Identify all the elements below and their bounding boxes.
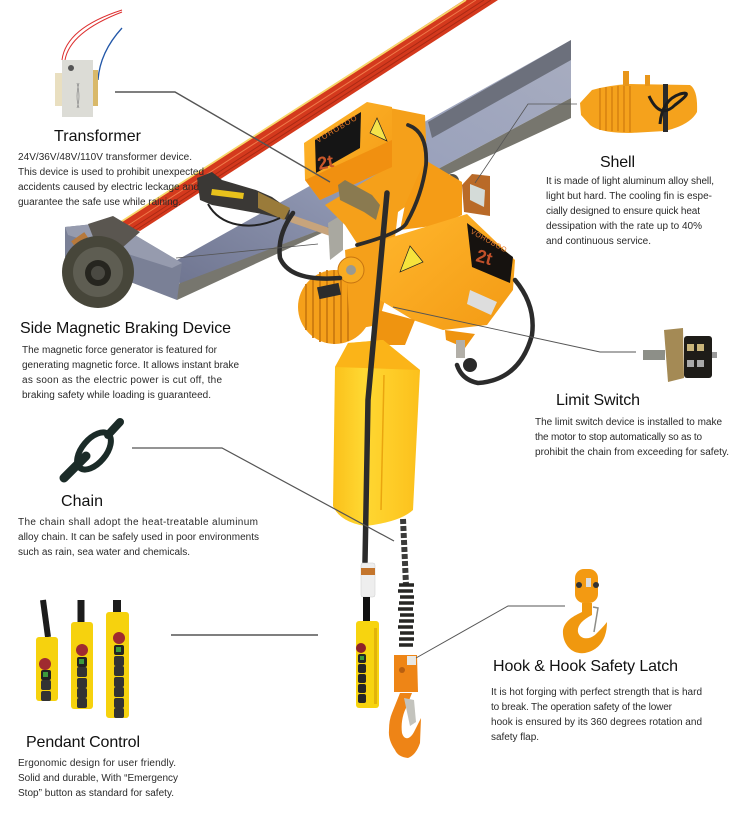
panel: shell: [546, 71, 714, 247]
motor: [298, 270, 372, 344]
text: shell description: dessipation with the rate up to 40%: [546, 221, 702, 232]
neck below gear: [375, 310, 415, 345]
hoist unit: VOHOBOO: [469, 229, 508, 254]
cables: [280, 125, 533, 562]
text: shell description: It is made of light aluminum alloy shell,: [546, 176, 714, 187]
icon: pendant with six buttons: [71, 600, 93, 709]
icon: pendant with four buttons: [36, 600, 58, 701]
text: limit switch description: prohibit the chain from exceeding for safety.: [535, 447, 729, 458]
hoist unit: [298, 102, 515, 372]
text: pendant description: Solid and durable, With “Emergency: [18, 773, 178, 784]
panel: hook and safety latch: [491, 569, 702, 743]
text: braking description: [22, 345, 239, 401]
steel beam: [65, 40, 571, 300]
icon: limit switch: [643, 328, 717, 382]
text: transformer description: guarantee the safe use while raining.: [18, 197, 181, 208]
text: pendant description: Stop” button as standard for safety.: [18, 788, 174, 799]
rear junction box: [462, 174, 490, 216]
text: shell description: [546, 176, 714, 247]
panel: pendant control: [18, 600, 178, 799]
text: shell description: cially designed to ensure quick heat: [546, 206, 700, 217]
icon: pendant with eight buttons: [106, 600, 129, 718]
text: limit switch description: The limit switch device is installed to make: [535, 417, 722, 428]
text: hook description: hook is ensured by its 360 degrees rotation and: [491, 717, 702, 728]
text: chain description: The chain shall adopt the heat-treatable aluminum: [18, 517, 258, 528]
text: braking description: as soon as the electric power is cut off, the: [22, 375, 222, 386]
brake cylinder: [338, 180, 380, 220]
heading: side magnetic braking device: Side Magnetic Braking Device: [20, 320, 231, 337]
text: limit switch description: [535, 417, 729, 458]
text: shell description: and continuous service.: [546, 236, 651, 247]
text: chain description: [18, 517, 259, 558]
text: transformer description: accidents caused by electric leckage and: [18, 182, 199, 193]
hand pendant on hoist: [356, 563, 379, 708]
panel: transformer: [18, 10, 204, 208]
text: transformer description: This device is used to prohibit unexpected: [18, 167, 204, 178]
text: chain description: alloy chain. It can be safely used in poor environments: [18, 532, 259, 543]
text: hook description: to break. The operation safety of the lower: [491, 702, 673, 713]
chain bag: [333, 340, 420, 526]
panel: chain: [18, 422, 259, 558]
hoist unit: 2t: [474, 246, 495, 269]
heading: limit switch: Limit Switch: [556, 392, 640, 409]
text: pendant description: [18, 758, 178, 799]
heading: hook and hook safety latch: Hook & Hook Safety Latch: [493, 658, 678, 675]
hoist unit: 2t: [316, 151, 335, 174]
text: limit switch description: the motor to stop automatically so as to: [535, 432, 702, 443]
control box upper: [304, 102, 392, 200]
heading: transformer: Transformer: [54, 128, 142, 145]
text: braking description: The magnetic force generator is featured for: [22, 345, 218, 356]
text: chain description: such as rain, sea water and chemicals.: [18, 547, 190, 558]
load chain and spring: [398, 519, 414, 645]
heading: chain: Chain: [61, 493, 103, 510]
text: pendant description: Ergonomic design for user friendly.: [18, 758, 176, 769]
current collector trolley: [197, 172, 343, 260]
icon: transformer: [55, 10, 122, 117]
text: hook description: safety flap.: [491, 732, 539, 743]
text: transformer description: 24V/36V/48V/110V transformer device.: [18, 152, 192, 163]
text: braking description: braking safety while loading is guaranteed.: [22, 390, 211, 401]
text: braking description: generating magnetic force. It allows instant brake: [22, 360, 239, 371]
gear case: [380, 214, 515, 330]
upper frame: [325, 108, 428, 248]
leader lines: [115, 92, 636, 658]
text: hook description: It is hot forging with perfect strength that is hard: [491, 687, 702, 698]
heading: shell: Shell: [600, 154, 635, 171]
text: transformer description: [18, 152, 204, 208]
panel: limit switch: [535, 328, 729, 458]
text: shell description: light but hard. The cooling fin is espe-: [546, 191, 712, 202]
hook block and lower hook: [389, 655, 421, 758]
hoist unit: VOHOBOO: [314, 113, 359, 145]
panel: side magnetic braking device: [20, 320, 239, 401]
end buffer wheel: [62, 216, 140, 308]
icon: motor shell: [580, 71, 697, 133]
conductor rail: [115, 0, 498, 231]
icon: hook: [563, 569, 607, 653]
icon: chain link: [64, 422, 120, 478]
text: hook description: [491, 687, 702, 743]
heading: pendant control: Pendant Control: [26, 734, 140, 751]
